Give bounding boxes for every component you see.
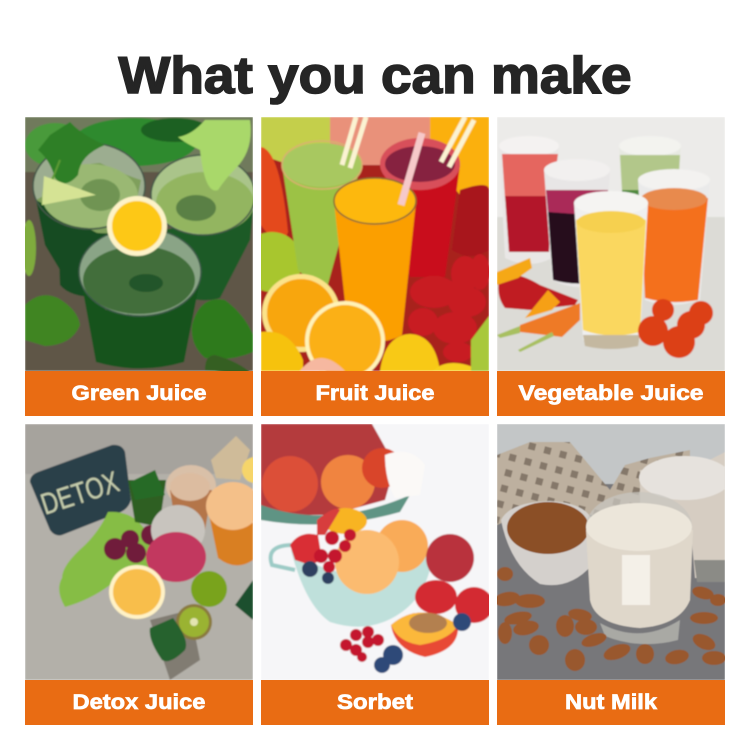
almonds [493, 567, 726, 671]
cut peach [391, 612, 458, 657]
cream straws [342, 117, 474, 168]
panel: detox juice [25, 424, 253, 725]
photo: three glasses of green juice [25, 117, 253, 371]
citrus slices [262, 274, 385, 381]
photo: sorbet in a bowl with fruit [261, 424, 489, 679]
strawberries [408, 254, 490, 362]
pink striped straw [401, 133, 422, 205]
orange glass [206, 482, 260, 566]
label: Vegetable Juice [497, 371, 725, 416]
photo: vegetable juices in tall glasses [497, 117, 725, 371]
detox chalkboard [30, 445, 131, 535]
label: Green Juice: Green Juice [72, 382, 206, 405]
peaches [262, 448, 402, 512]
celery [178, 120, 251, 190]
yellow juice glass [574, 191, 648, 349]
tomatoes [638, 299, 713, 358]
green smoothie [282, 141, 362, 295]
panel: nut milk [497, 424, 725, 725]
red juice glass [499, 136, 559, 264]
pale juice glass [166, 465, 216, 530]
beets [104, 525, 161, 563]
panel: vegetable juice [497, 117, 725, 416]
lettuce [59, 512, 172, 607]
red juice [380, 138, 460, 277]
sorbet scoops [323, 508, 428, 594]
strawberry in bowl [290, 534, 322, 565]
blueberries [302, 561, 334, 584]
label: Vegetable Juice: Vegetable Juice [518, 382, 704, 405]
purple juice glass [544, 159, 610, 287]
strawberries right [415, 580, 493, 623]
title: What you can make [118, 47, 632, 105]
label: Nut Milk [497, 680, 725, 725]
orange half [109, 565, 165, 619]
spinach leaves [150, 618, 186, 661]
parsley [38, 122, 105, 183]
berries bottom [340, 626, 384, 662]
photo: milk glasses with almonds [497, 424, 725, 680]
bowl [271, 545, 433, 627]
front milk glass [586, 492, 693, 644]
panel: green juice [25, 117, 253, 416]
kiwi [176, 604, 212, 640]
label: Sorbet [261, 680, 489, 725]
carrots [497, 303, 580, 352]
lemon wedge [242, 457, 268, 483]
panel: sorbet [261, 424, 489, 725]
beet juice glass [146, 505, 206, 582]
green juice glass [619, 136, 681, 225]
spinach shot [128, 470, 166, 525]
peppers [497, 258, 578, 318]
broccoli [192, 299, 253, 359]
ginger [211, 436, 250, 480]
photo: detox sign, juices and produce [25, 424, 253, 680]
photo: fruit juices and whole fruit [261, 117, 489, 371]
orange juice glass [638, 169, 710, 305]
back glass [639, 452, 731, 582]
lemon slice [107, 196, 167, 256]
orange juice [334, 178, 416, 341]
label: Detox Juice [25, 680, 253, 725]
almond bowl [501, 501, 592, 585]
label: Green Juice [25, 371, 253, 416]
detox chalkboard: DETOX [37, 466, 123, 522]
front glass [79, 228, 201, 368]
label: Detox Juice: Detox Juice [72, 691, 206, 714]
right side peach [426, 534, 474, 582]
label: Fruit Juice: Fruit Juice [316, 382, 434, 405]
redcurrants [314, 529, 356, 573]
label: Sorbet: Sorbet [337, 691, 413, 714]
lime [191, 571, 227, 607]
label: Nut Milk: Nut Milk [565, 691, 657, 714]
blossoms [385, 452, 425, 498]
label: Fruit Juice [261, 371, 489, 416]
right glass [151, 155, 255, 300]
panel: fruit juice [261, 117, 489, 416]
left glass [33, 143, 145, 297]
cloth [497, 442, 690, 525]
